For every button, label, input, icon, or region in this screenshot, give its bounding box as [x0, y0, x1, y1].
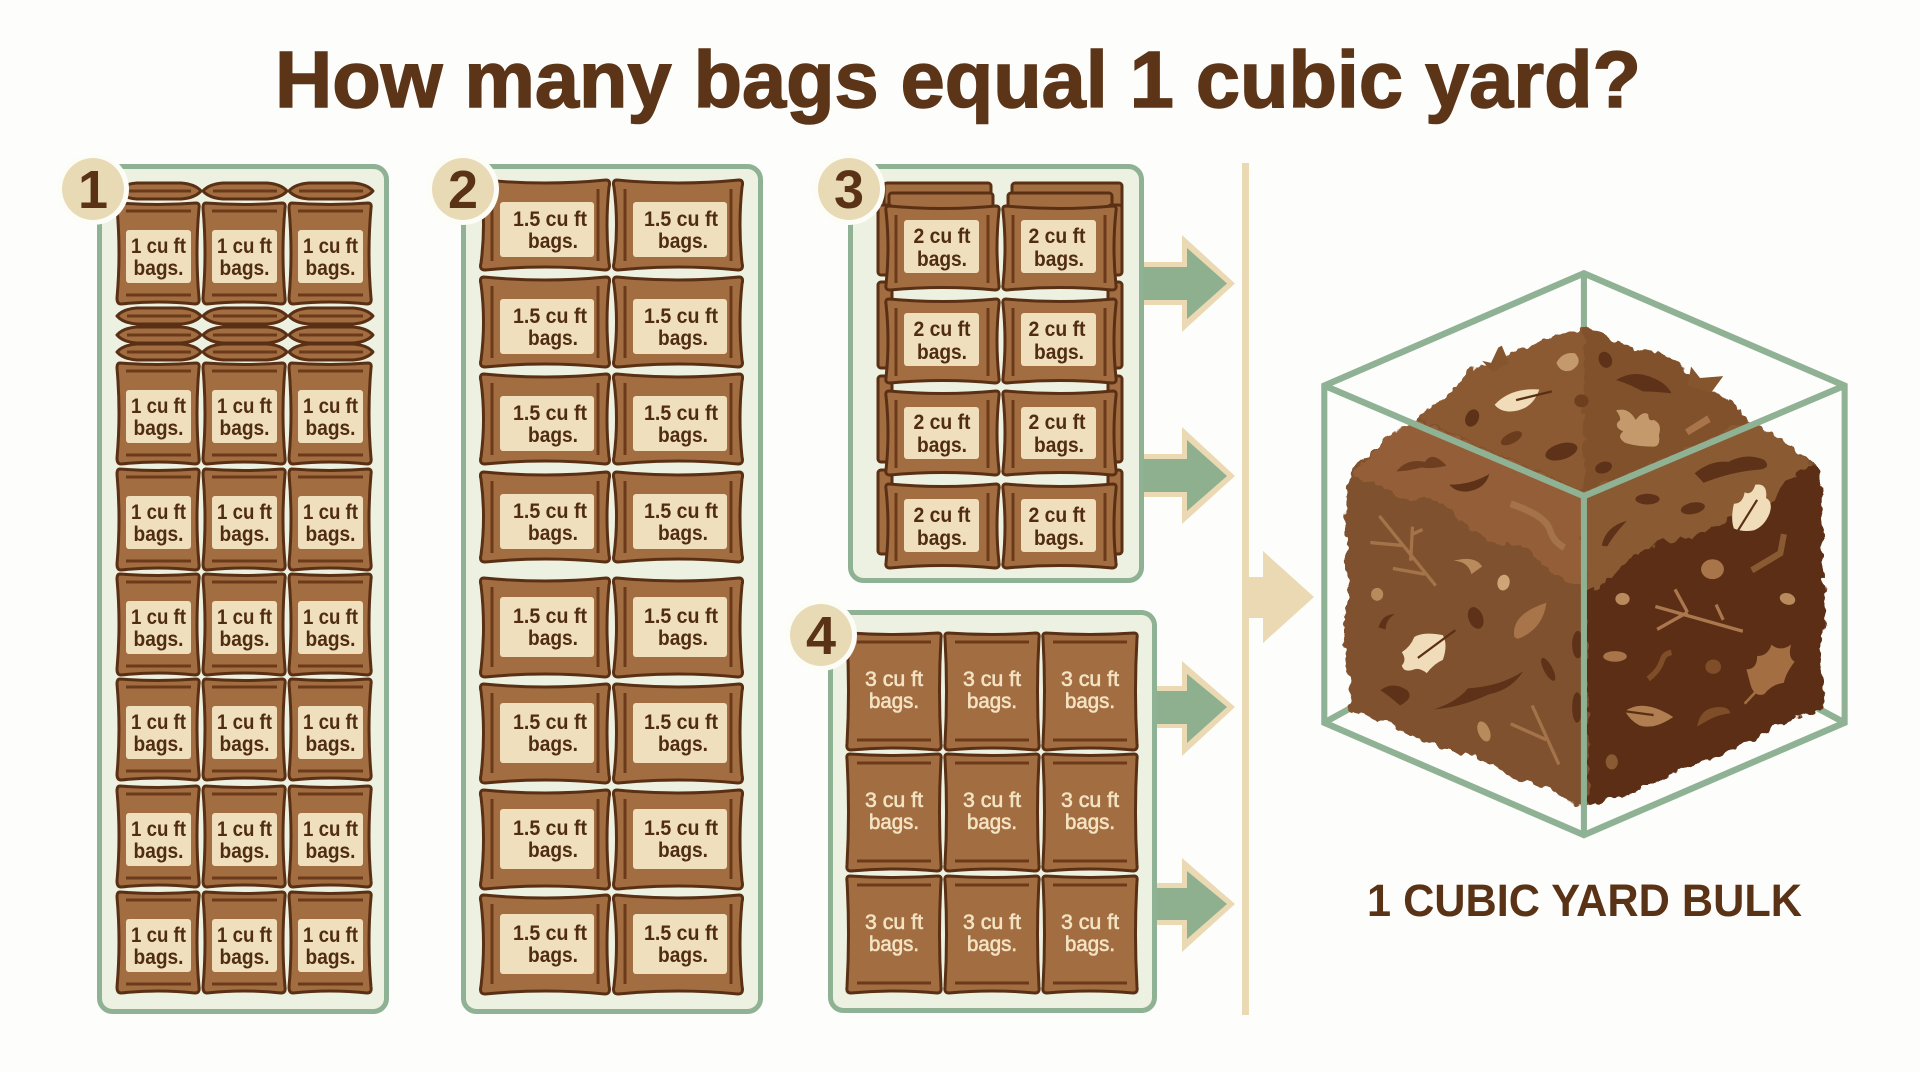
bag row 8: [480, 895, 743, 994]
bag row 3: 2 cu ft: [914, 411, 971, 434]
bag row 6: bags.: [658, 733, 708, 756]
bag row 2: 1.5 cu ft: [513, 305, 587, 328]
bag row 2: bags.: [869, 811, 919, 834]
bag row 2: bags.: [528, 327, 578, 350]
panel 1 frame: [100, 166, 386, 1012]
bag row 4: [117, 574, 371, 675]
bag row 1: [847, 633, 1137, 750]
bag row 1: 1 cu ft: [131, 235, 186, 258]
bag row 3: 3 cu ft: [865, 911, 923, 934]
bag row 2: 3 cu ft: [1061, 789, 1119, 812]
badge 2: [427, 153, 499, 225]
bag row 1: bags.: [528, 230, 578, 253]
bag row 6: bags.: [134, 840, 184, 863]
bag row 6: 1 cu ft: [131, 818, 186, 841]
panel 3 frame: [850, 166, 1142, 580]
panel 4: 3 cu ft bags: [785, 599, 1154, 1010]
bag row 1: [480, 180, 743, 270]
arrow: panel 3 lower: [1144, 427, 1235, 524]
bag row 8: 1.5 cu ft: [644, 922, 718, 945]
bag row 3: 1 cu ft: [217, 501, 272, 524]
bag row 1: bags.: [869, 690, 919, 713]
bag row 1: 1 cu ft: [303, 235, 358, 258]
bag row 6: 1 cu ft: [217, 818, 272, 841]
divider line with arrow to cube: [1242, 163, 1314, 1015]
bag row 4: 1 cu ft: [131, 606, 186, 629]
bag row 1: [117, 203, 371, 304]
bag row 2: 3 cu ft: [865, 789, 923, 812]
bag row 4: 1 cu ft: [303, 606, 358, 629]
bag row 3: 1 cu ft: [303, 501, 358, 524]
bag row 5: [117, 679, 371, 780]
bag row 4: [886, 484, 1116, 568]
bag row 7: [117, 892, 371, 993]
bag row 5: 1.5 cu ft: [644, 605, 718, 628]
stacked bags behind: [878, 183, 1122, 554]
bag row 3: [886, 391, 1116, 475]
panel 4 frame: [830, 612, 1154, 1010]
bag row 6: [480, 684, 743, 783]
bag row 8: bags.: [658, 944, 708, 967]
bag row 8: 1.5 cu ft: [513, 922, 587, 945]
bag row 1: bags.: [134, 257, 184, 280]
bag row 2: 2 cu ft: [914, 318, 971, 341]
bag row 4: 1.5 cu ft: [644, 500, 718, 523]
bag row 4: bags.: [917, 527, 967, 550]
bag row 6: [117, 786, 371, 887]
bag row 1: [886, 206, 1116, 290]
bag row 3: bags.: [1065, 933, 1115, 956]
cube front frame: [1324, 273, 1845, 835]
bag row 3: bags.: [528, 424, 578, 447]
bag row 2: 1.5 cu ft: [644, 305, 718, 328]
bag row 2: [886, 299, 1116, 383]
panel 3: 2 cu ft bags: [813, 153, 1142, 580]
bag row 1: 1.5 cu ft: [644, 208, 718, 231]
bag row 3: [847, 876, 1137, 993]
title: How many bags equal 1 cubic yard?: [275, 35, 1641, 124]
bag row 3: bags.: [1034, 434, 1084, 457]
bag row 2: bags.: [1034, 341, 1084, 364]
bag row 4: 2 cu ft: [914, 504, 971, 527]
bag row 3: bags.: [306, 523, 356, 546]
flat bags top row: [117, 183, 373, 199]
bag row 3: 3 cu ft: [1061, 911, 1119, 934]
bag row 5: bags.: [658, 627, 708, 650]
bag row 2: bags.: [1065, 811, 1115, 834]
bag row 1: 2 cu ft: [1028, 225, 1086, 248]
bag row 6: 1.5 cu ft: [644, 711, 718, 734]
bag row 7: 1 cu ft: [131, 924, 186, 947]
bag row 7: bags.: [658, 839, 708, 862]
bag row 7: bags.: [220, 946, 270, 969]
flat bags middle stack: [117, 308, 373, 360]
bag row 5: 1 cu ft: [303, 711, 358, 734]
bag row 4: bags.: [658, 522, 708, 545]
bag row 3: 1.5 cu ft: [513, 402, 587, 425]
bag row 3: [117, 469, 371, 570]
compost cube: [1324, 273, 1845, 835]
cube back edges: [1324, 273, 1845, 723]
bag row 5: [480, 578, 743, 677]
bag row 3: bags.: [220, 523, 270, 546]
arrow: panel 3 upper: [1144, 235, 1235, 332]
bag row 7: bags.: [134, 946, 184, 969]
arrow: panel 4 upper: [1157, 661, 1235, 756]
panel 2 frame: [464, 166, 760, 1012]
bag row 2: 2 cu ft: [1028, 318, 1086, 341]
bag row 5: 1 cu ft: [131, 711, 186, 734]
bag row 6: bags.: [528, 733, 578, 756]
bag row 3: 2 cu ft: [1028, 411, 1086, 434]
bag row 3: bags.: [658, 424, 708, 447]
bag row 1: 1.5 cu ft: [513, 208, 587, 231]
badge 4: [785, 599, 857, 671]
bag row 2: bags.: [134, 417, 184, 440]
bag row 1: bags.: [1065, 690, 1115, 713]
bag row 5: bags.: [306, 733, 356, 756]
bag row 7: bags.: [306, 946, 356, 969]
badge 1: 1: [78, 160, 108, 220]
bag row 7: 1 cu ft: [303, 924, 358, 947]
bag row 4: bags.: [306, 628, 356, 651]
twigs: [1370, 504, 1784, 765]
bag row 3: 3 cu ft: [963, 911, 1021, 934]
bag row 1: bags.: [306, 257, 356, 280]
bag row 5: bags.: [220, 733, 270, 756]
bag row 7: [480, 790, 743, 889]
bag row 2: bags.: [220, 417, 270, 440]
bag row 1: bags.: [917, 248, 967, 271]
bag row 2: 3 cu ft: [963, 789, 1021, 812]
bag row 2: [117, 363, 371, 464]
panel 1: 1 cu ft bags: [57, 153, 386, 1012]
bag row 2: bags.: [917, 341, 967, 364]
bag row 3: bags.: [869, 933, 919, 956]
bag row 1: bags.: [658, 230, 708, 253]
bag row 4: 1.5 cu ft: [513, 500, 587, 523]
bag row 4: [480, 472, 743, 562]
bag row 5: bags.: [134, 733, 184, 756]
bag row 3: bags.: [134, 523, 184, 546]
dark chunks: [1379, 349, 1767, 723]
bag row 2: 1 cu ft: [303, 395, 358, 418]
bag row 5: bags.: [528, 627, 578, 650]
caption: 1 CUBIC YARD BULK: [1367, 875, 1802, 926]
bag row 4: bags.: [1034, 527, 1084, 550]
bag row 2: 1 cu ft: [131, 395, 186, 418]
arrow: panel 4 lower: [1157, 858, 1235, 952]
bag row 1: bags.: [220, 257, 270, 280]
bag row 6: bags.: [306, 840, 356, 863]
bag row 1: bags.: [967, 690, 1017, 713]
bag row 1: 1 cu ft: [217, 235, 272, 258]
bag row 3: bags.: [917, 434, 967, 457]
tan chunks: [1371, 353, 1796, 770]
bag row 1: bags.: [1034, 248, 1084, 271]
bag row 1: 3 cu ft: [1061, 668, 1119, 691]
bag row 2: bags.: [306, 417, 356, 440]
bag row 2: bags.: [967, 811, 1017, 834]
compost body: [1343, 328, 1825, 806]
bag row 7: 1 cu ft: [217, 924, 272, 947]
badge 2: 2: [448, 160, 478, 220]
bag row 6: bags.: [220, 840, 270, 863]
bag row 1: 3 cu ft: [963, 668, 1021, 691]
bag row 3: 1.5 cu ft: [644, 402, 718, 425]
bag row 6: 1.5 cu ft: [513, 711, 587, 734]
bag row 2: [480, 277, 743, 367]
badge 3: [813, 153, 885, 225]
bag row 1: 2 cu ft: [914, 225, 971, 248]
leaves: [1402, 346, 1795, 727]
bag row 5: 1 cu ft: [217, 711, 272, 734]
badge 3: 3: [834, 160, 864, 220]
panel 2: 1.5 cu ft bags: [427, 153, 760, 1012]
bag row 2: [847, 754, 1137, 871]
bag row 4: bags.: [528, 522, 578, 545]
bag row 2: 1 cu ft: [217, 395, 272, 418]
bag row 4: 2 cu ft: [1028, 504, 1086, 527]
bag row 3: 1 cu ft: [131, 501, 186, 524]
bag row 3: bags.: [967, 933, 1017, 956]
bag row 1: 3 cu ft: [865, 668, 923, 691]
bag row 4: bags.: [134, 628, 184, 651]
badge 4: 4: [806, 606, 836, 666]
bag row 7: 1.5 cu ft: [513, 817, 587, 840]
bag row 7: 1.5 cu ft: [644, 817, 718, 840]
bag row 8: bags.: [528, 944, 578, 967]
badge 1: [57, 153, 129, 225]
bag row 7: bags.: [528, 839, 578, 862]
bag row 3: [480, 374, 743, 464]
bag row 4: bags.: [220, 628, 270, 651]
bag row 2: bags.: [658, 327, 708, 350]
bag row 4: 1 cu ft: [217, 606, 272, 629]
bag row 6: 1 cu ft: [303, 818, 358, 841]
bag row 5: 1.5 cu ft: [513, 605, 587, 628]
